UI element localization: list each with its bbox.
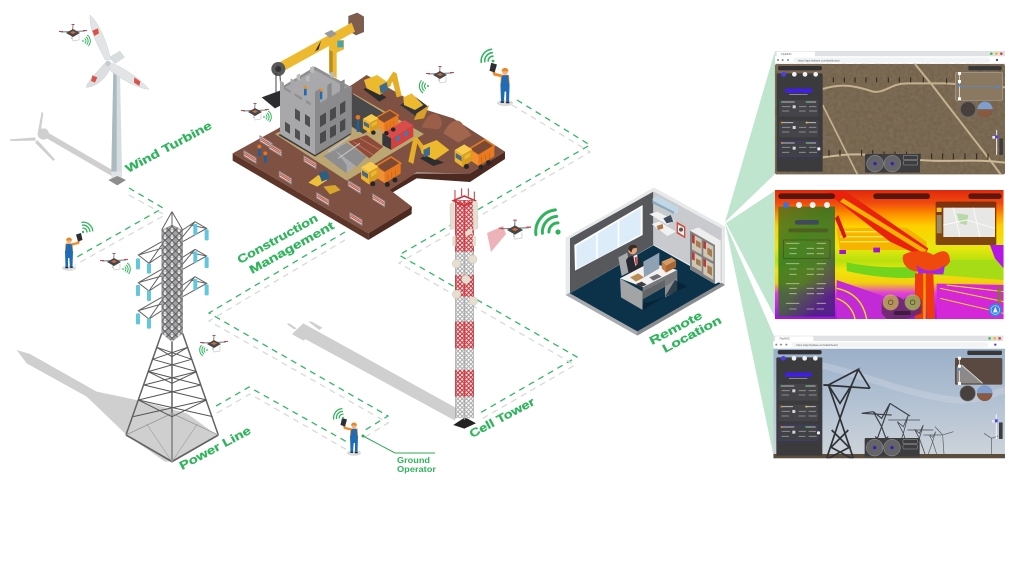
wifi: ground operator	[334, 409, 344, 419]
drone: construction upper	[426, 66, 454, 83]
desk	[620, 263, 677, 310]
cell tower label: Cell Tower	[468, 396, 538, 441]
remote office room	[566, 187, 725, 336]
remote location label: Location	[661, 315, 724, 356]
wifi: wind turbine drone	[82, 35, 93, 47]
construction management label: Construction	[236, 212, 320, 267]
power line shadow	[17, 350, 217, 462]
wall shelves	[649, 212, 676, 236]
operator: ground	[340, 418, 361, 456]
wifi: inspection drone	[536, 210, 561, 235]
thermal return button	[989, 303, 1002, 317]
computer monitor	[643, 253, 662, 281]
crane counterweight and arm	[262, 13, 364, 108]
connector: construction to power line loop	[209, 232, 388, 439]
wifi: wind turbine operator	[82, 222, 93, 233]
camera inset	[955, 357, 1002, 385]
green projection beams	[725, 51, 776, 458]
ground operator callout: Operator	[397, 464, 437, 474]
power line label: Power Line	[178, 425, 253, 473]
excavator lower	[408, 137, 449, 166]
dashboard overlays	[777, 66, 1003, 173]
excavator upper	[363, 72, 402, 102]
screen: power line dashboard	[773, 336, 1005, 458]
box of files	[662, 257, 676, 273]
concrete slabs and rebar	[323, 135, 383, 173]
road roller	[308, 171, 341, 194]
thermal dashboard icons	[783, 202, 830, 208]
air conditioner	[653, 196, 678, 214]
cell tower	[450, 188, 478, 429]
drone: wind turbine	[59, 24, 87, 41]
wifi: construction operator	[481, 49, 494, 62]
inspection drone with camera cone	[487, 220, 531, 252]
screen: thermal camera dashboard	[775, 190, 1004, 319]
building under construction	[280, 66, 352, 155]
connector: wind turbine to operator	[75, 188, 165, 265]
remote location label: Remote	[648, 310, 705, 348]
construction management label: Management	[248, 220, 337, 277]
camera inset	[955, 72, 1003, 100]
site base	[233, 75, 505, 240]
wall clock	[677, 222, 685, 238]
wifi: construction upper drone	[416, 79, 429, 93]
remote location label	[648, 310, 724, 356]
ground operator callout	[362, 434, 437, 474]
transmission tower	[126, 212, 218, 462]
sky and horizon	[773, 349, 1005, 458]
ground operator callout: Ground	[397, 455, 430, 465]
bulldozer	[400, 93, 429, 120]
operator: wind turbine	[62, 233, 82, 271]
wind turbine label: Wind Turbine	[124, 120, 214, 176]
screen: aerial map dashboard	[775, 51, 1005, 174]
pylons receding	[823, 369, 998, 458]
bookshelf	[690, 227, 721, 284]
connector: power line to ground operator	[216, 387, 347, 450]
thermal map inset	[936, 202, 996, 245]
wifi: construction left drone	[263, 111, 274, 123]
construction management label	[236, 212, 337, 277]
drone: power line lower	[200, 336, 228, 352]
drone: power line upper	[100, 254, 128, 270]
window	[574, 205, 643, 271]
operator: construction	[489, 63, 513, 106]
cell tower shadow	[287, 322, 457, 421]
drone: construction left	[241, 104, 269, 120]
office worker at desk	[618, 245, 644, 277]
dashboard overlays	[776, 350, 1003, 457]
map imagery	[775, 64, 1005, 174]
thermal joystick controls	[882, 294, 922, 319]
wifi: power line upper drone	[122, 263, 133, 275]
fence barriers	[244, 136, 385, 225]
construction site	[233, 13, 505, 240]
trucks	[363, 110, 398, 135]
wind turbine	[86, 15, 149, 185]
site workers	[257, 115, 360, 163]
wifi: power line lower drone	[197, 344, 208, 356]
connector: cell tower to site operator	[399, 100, 590, 420]
site cabin	[382, 120, 413, 150]
wind turbine shadow	[10, 112, 113, 176]
thermal scene	[775, 190, 1004, 319]
thermal left panel	[778, 207, 835, 317]
